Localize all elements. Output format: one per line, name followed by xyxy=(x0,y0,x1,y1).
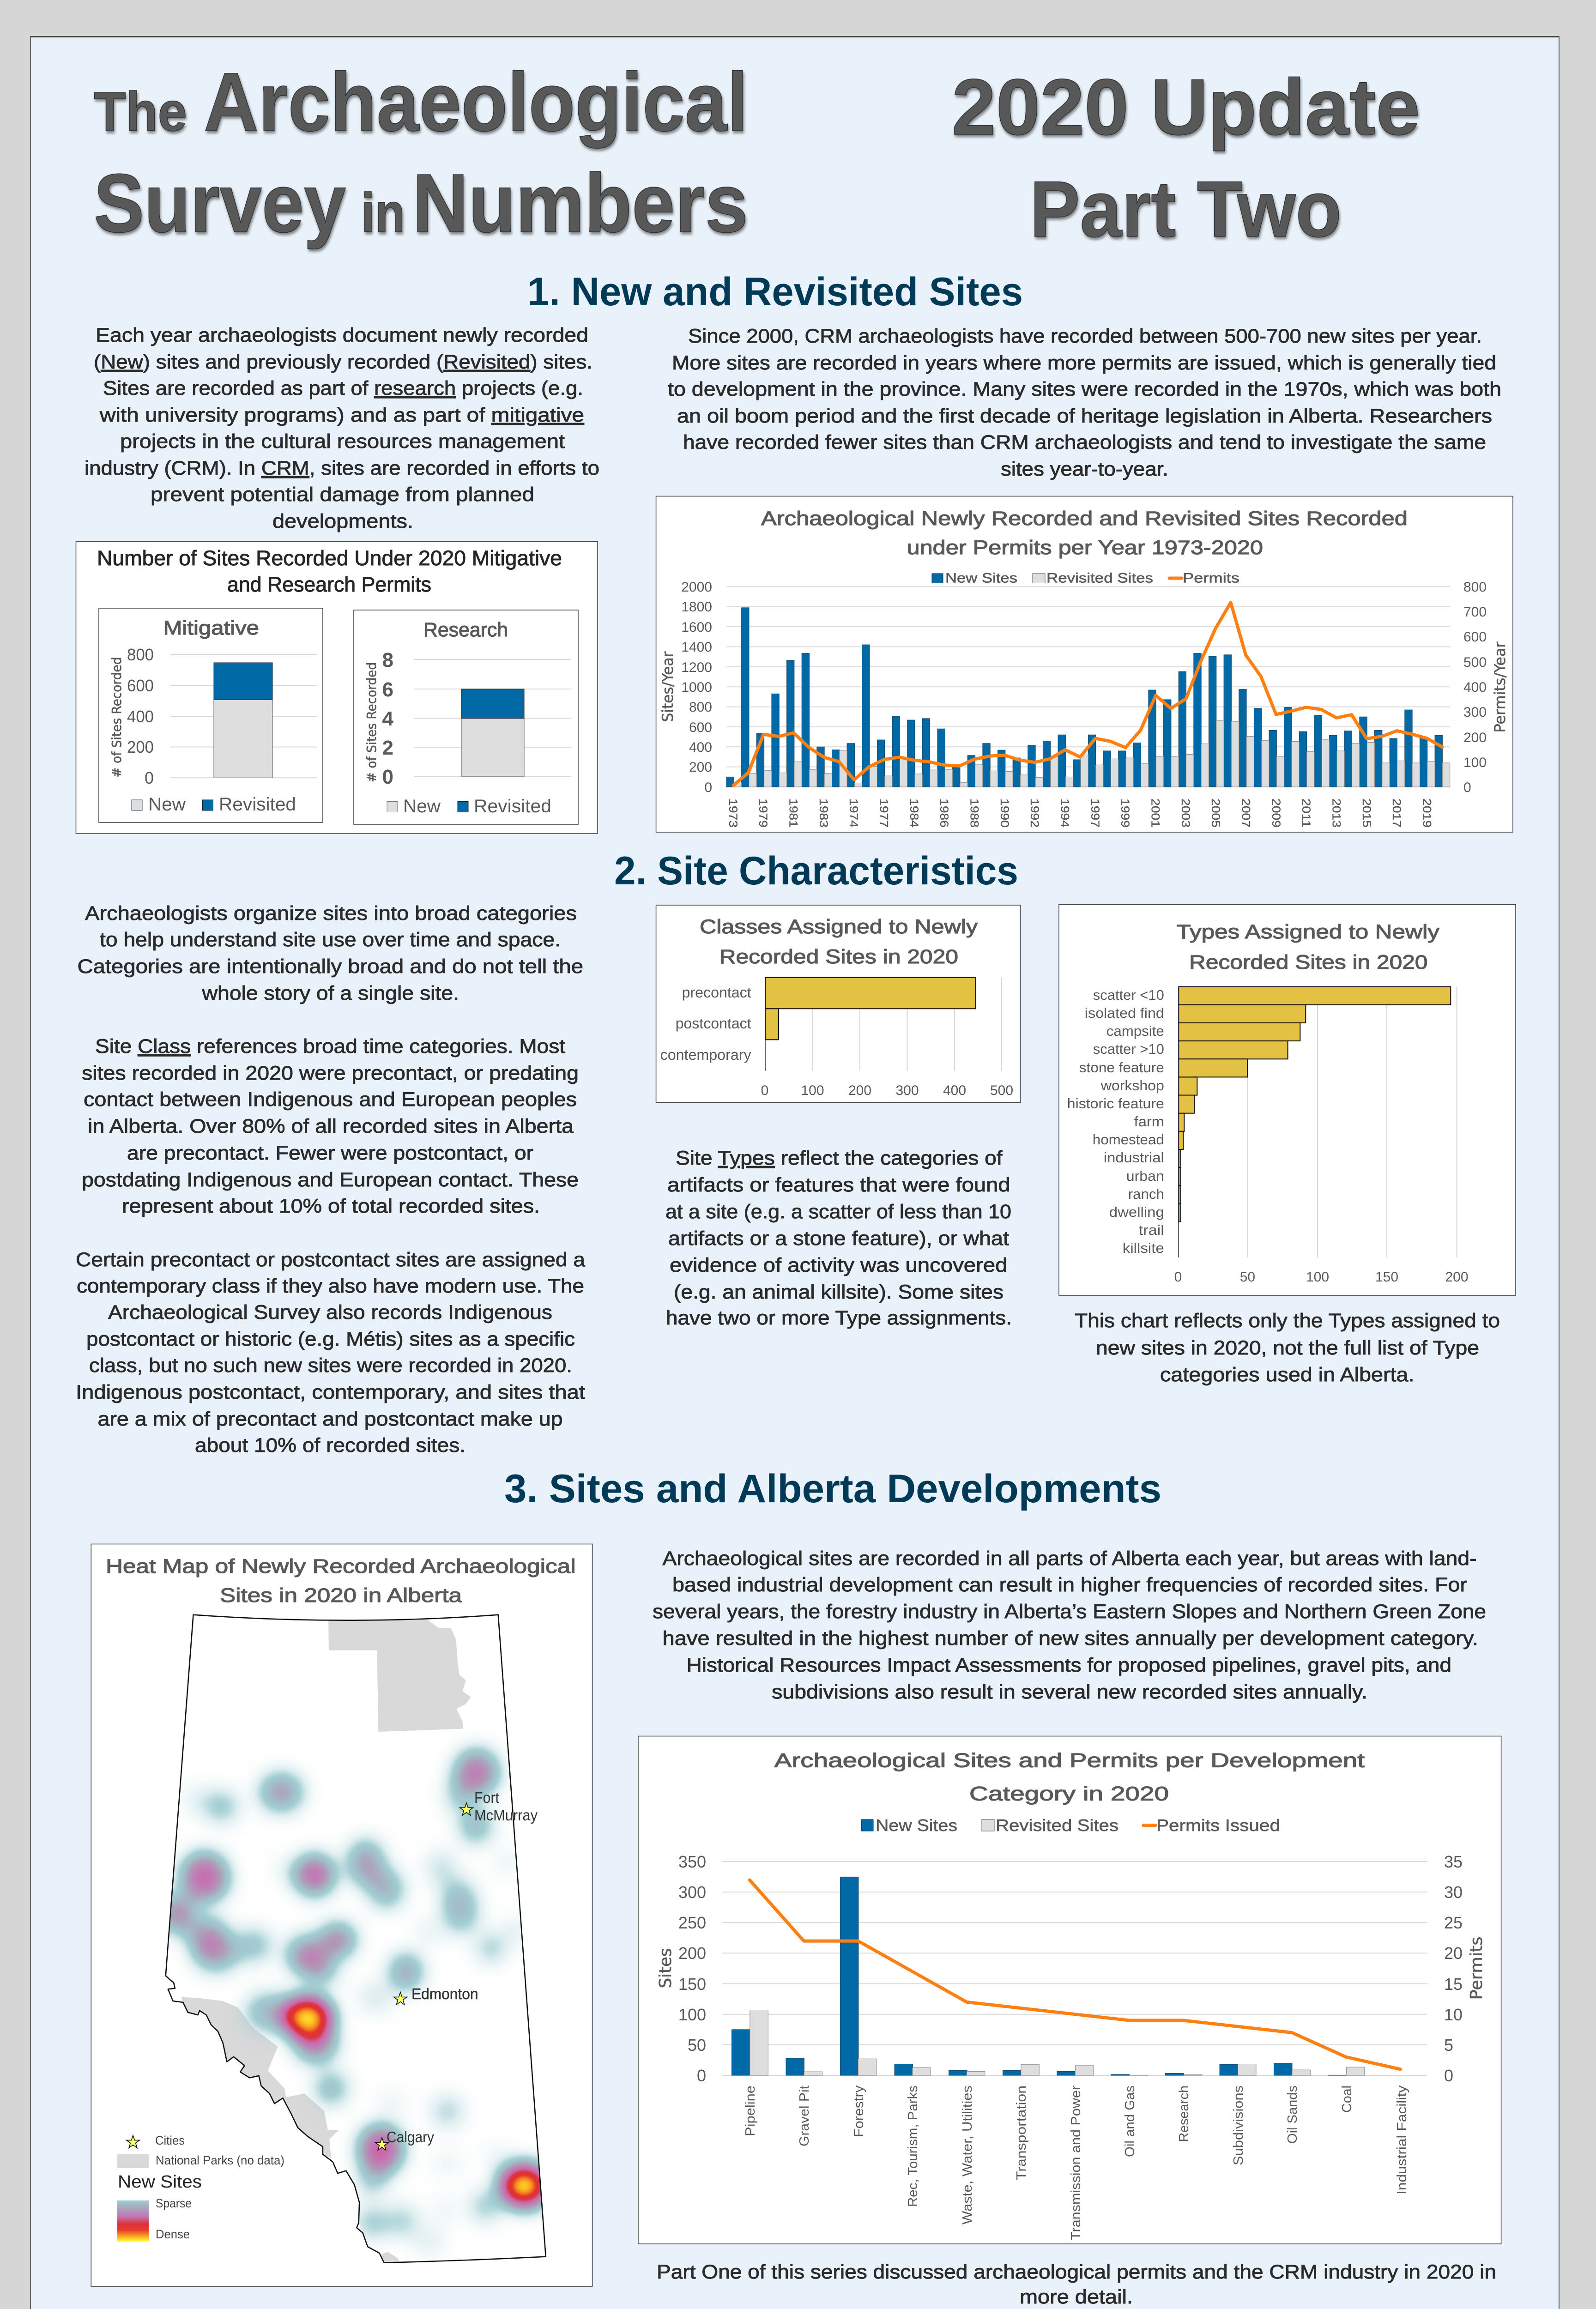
chart heading: and Research Permits xyxy=(227,573,431,596)
text block: site categories and class: Indigenous postcontact, contemporary, and sites that xyxy=(76,1381,585,1403)
left axis labels: 200 xyxy=(678,1944,706,1963)
bars xyxy=(1179,987,1451,1222)
left axis labels: 200 xyxy=(689,760,712,775)
bar: precontact xyxy=(765,978,975,1009)
chart: research: 4 xyxy=(382,707,394,730)
left axis labels: 150 xyxy=(678,1975,706,1994)
bars: new sites xyxy=(726,608,1442,787)
chart: sites and permits per development category xyxy=(638,1736,1501,2244)
category labels: Subdivisions xyxy=(1231,2085,1246,2165)
text block: section 1 intro: (New) sites and previously recorded ( Revisited ) sites. xyxy=(94,351,592,373)
bars: new sites xyxy=(732,1877,1347,2075)
bar: postcontact xyxy=(765,1009,779,1040)
text block: site types: (e.g. an animal killsite). Some sites xyxy=(674,1281,1004,1303)
parks: Rocky Mountains xyxy=(181,1997,399,2263)
category labels: Transmission and Power xyxy=(1069,2085,1083,2240)
park: Wood Buffalo xyxy=(328,1620,471,1732)
text block: site categories and class xyxy=(76,902,585,1457)
year axis labels: 1979 xyxy=(756,798,769,828)
right axis labels: 300 xyxy=(1463,705,1487,720)
left axis labels: 100 xyxy=(678,2005,706,2024)
right axis labels: 100 xyxy=(1463,755,1487,770)
year axis labels: 2007 xyxy=(1239,798,1252,828)
text block: section 3: based industrial development can result in higher frequencies of recorded sites. For xyxy=(672,1574,1467,1596)
value axis labels: 150 xyxy=(1375,1269,1398,1285)
chart: mitigative: 800 xyxy=(127,645,154,664)
title: The Archaeological Survey in Numbers: Numbers xyxy=(412,157,748,250)
city: Calgary xyxy=(375,2128,434,2150)
text block: section 1 intro: Sites are recorded as part of research projects (e.g. xyxy=(103,377,583,399)
chart: research xyxy=(354,610,578,824)
text block: site categories and class: in Alberta. Over 80% of all recorded sites in Alberta xyxy=(88,1115,574,1137)
text block: section 3: Archaeological sites are recorded in all parts of Alberta each year, but areas with land- xyxy=(662,1547,1477,1570)
right axis labels: 25 xyxy=(1444,1913,1463,1932)
map legend: Cities xyxy=(155,2134,185,2147)
chart: mitigative: New xyxy=(148,794,186,815)
text block: site categories and class: class, but no such new sites were recorded in 2020. xyxy=(89,1354,572,1377)
year axis labels: 2019 xyxy=(1421,798,1433,828)
category labels: stone feature xyxy=(1079,1059,1164,1076)
line: permits xyxy=(733,603,1442,786)
text block: section 1 intro: with university programs) and as part of mitigative xyxy=(99,404,584,426)
title: The Archaeological Survey in Numbers: Survey xyxy=(94,157,346,250)
category labels: Industrial Facility xyxy=(1395,2085,1409,2194)
text block: section 1 right: an oil boom period and the first decade of heritage legislation in Alberta. Researchers xyxy=(677,405,1492,427)
value axis labels: 200 xyxy=(1445,1269,1469,1285)
chart heading: Number of Sites Recorded Under 2020 Mitigative xyxy=(97,546,562,570)
category labels: trail xyxy=(1139,1222,1164,1238)
text block: section 3: several years, the forestry industry in Alberta’s Eastern Slopes and Northern Green Zone xyxy=(653,1601,1486,1623)
text block: section 3: Historical Resources Impact Assessments for proposed pipelines, gravel pits, and xyxy=(687,1654,1451,1676)
chart: mitigative: Revisited xyxy=(219,794,296,815)
category labels xyxy=(1067,987,1164,1256)
year axis labels: 1974 xyxy=(847,798,860,828)
category labels xyxy=(660,984,751,1063)
chart: mitigative: 400 xyxy=(127,707,154,726)
category labels: contemporary xyxy=(660,1046,751,1063)
right axis labels: 20 xyxy=(1444,1944,1463,1963)
text block: site types: have two or more Type assignments. xyxy=(666,1307,1012,1329)
left axis labels xyxy=(681,580,712,795)
left axis labels: 1200 xyxy=(681,660,712,675)
chart: mitigative xyxy=(99,608,323,822)
category labels: precontact xyxy=(682,984,751,1001)
axis title: sites: Sites xyxy=(656,1948,675,1989)
text block: site types: artifacts or features that were found xyxy=(667,1174,1010,1196)
year axis labels: 2001 xyxy=(1149,798,1162,828)
text block: section 1 right xyxy=(668,325,1501,480)
chart: research: New xyxy=(403,796,441,816)
left axis labels: 350 xyxy=(678,1852,706,1871)
city: Edmonton xyxy=(394,1985,478,2005)
text block: types chart note: new sites in 2020, not the full list of Type xyxy=(1096,1337,1479,1359)
text block: site categories and class: to help understand site use over time and space. xyxy=(100,929,561,951)
category labels: dwelling xyxy=(1109,1204,1164,1220)
value axis labels: 200 xyxy=(848,1083,871,1098)
value axis labels xyxy=(1174,1269,1469,1285)
map legend: New Sites xyxy=(118,2172,202,2192)
text block: site categories and class: represent about 10% of total recorded sites. xyxy=(122,1195,540,1217)
text block: site categories and class: Archaeologists organize sites into broad categories xyxy=(85,902,577,925)
chart: research: Revisited xyxy=(474,796,551,816)
text block: site categories and class: sites recorded in 2020 were precontact, or predating xyxy=(82,1062,579,1084)
category labels: workshop xyxy=(1100,1077,1164,1094)
value axis labels: 100 xyxy=(801,1083,824,1098)
right axis labels: 35 xyxy=(1444,1852,1463,1871)
text block: section 3 xyxy=(653,1547,1486,1703)
category labels: urban xyxy=(1126,1168,1164,1184)
chart heading: Recorded Sites in 2020 xyxy=(719,946,958,968)
left axis labels: 0 xyxy=(697,2066,706,2085)
text block: section 1 right: More sites are recorded in years where more permits are issued, which is generally tied xyxy=(672,352,1496,374)
category labels: postcontact xyxy=(676,1015,751,1032)
category labels: homestead xyxy=(1093,1131,1164,1148)
category labels: scatter >10 xyxy=(1093,1041,1164,1057)
right axis labels: 0 xyxy=(1444,2066,1453,2085)
title: The Archaeological Survey in Numbers: in xyxy=(361,182,405,244)
left axis labels: 2000 xyxy=(681,580,712,595)
chart heading xyxy=(97,546,562,596)
axis title: sites per year: Sites/Year xyxy=(659,651,677,722)
text block: site categories and class: postdating Indigenous and European contact. These xyxy=(82,1169,579,1191)
right axis labels: 500 xyxy=(1463,655,1487,670)
text block: part one note: more detail. xyxy=(1020,2286,1133,2308)
value axis labels: 0 xyxy=(1174,1269,1182,1285)
right axis labels: 200 xyxy=(1463,730,1487,745)
chart heading: Types Assigned to Newly xyxy=(1177,921,1440,943)
category labels: ranch xyxy=(1128,1186,1164,1202)
category labels: Oil Sands xyxy=(1285,2085,1300,2144)
heat map density xyxy=(159,1750,548,2254)
Alberta outline xyxy=(166,1615,546,2263)
chart: classes assigned xyxy=(656,905,1020,1103)
year axis labels: 1997 xyxy=(1088,798,1101,828)
bars: revisited sites xyxy=(750,2010,1365,2075)
chart: types assigned xyxy=(1059,905,1516,1295)
chart: newly recorded and revisited sites per year xyxy=(656,496,1513,832)
legend: Permits Issued xyxy=(1156,1816,1280,1835)
value axis labels: 50 xyxy=(1240,1269,1255,1285)
chart heading: Recorded Sites in 2020 xyxy=(1189,951,1428,973)
year axis labels: 2003 xyxy=(1179,798,1192,828)
text block: site categories and class: contemporary class if they also have modern use. The xyxy=(77,1275,584,1297)
text block: site types: artifacts or a stone feature), or what xyxy=(668,1227,1009,1250)
text block: site categories and class: postcontact or historic (e.g. Métis) sites as a specific xyxy=(86,1328,575,1350)
right axis labels: 30 xyxy=(1444,1883,1463,1902)
text block: types chart note: This chart reflects only the Types assigned to xyxy=(1075,1310,1500,1332)
left axis labels: 250 xyxy=(678,1913,706,1932)
legend: Permits xyxy=(1183,571,1239,586)
map legend: Sparse xyxy=(156,2196,192,2210)
text block: site categories and class: Categories are intentionally broad and do not tell the xyxy=(78,955,583,978)
category labels: Gravel Pit xyxy=(797,2085,812,2146)
legend: Revisited Sites xyxy=(996,1816,1118,1835)
year axis labels: 2015 xyxy=(1360,798,1373,828)
year axis labels: 2013 xyxy=(1330,798,1343,828)
text block: section 1 intro: developments. xyxy=(272,510,413,532)
chart heading xyxy=(1177,921,1440,973)
text block: section 1 right: Since 2000, CRM archaeologists have recorded between 500-700 new sites per year. xyxy=(688,325,1482,347)
text block: part one note: Part One of this series discussed archaeological permits and the CRM industry in 2020 in xyxy=(657,2261,1496,2283)
text block: part one note xyxy=(657,2261,1496,2308)
year axis labels: 1981 xyxy=(787,798,800,828)
year axis labels: 1992 xyxy=(1028,798,1041,828)
chart heading: Archaeological Sites and Permits per Development xyxy=(774,1749,1365,1771)
right axis labels: 800 xyxy=(1463,580,1487,595)
value axis labels: 100 xyxy=(1306,1269,1329,1285)
text block: section 3: have resulted in the highest number of new sites annually per development category. xyxy=(662,1627,1478,1650)
chart: research: 0 xyxy=(382,766,393,788)
chart: mitigative: 200 xyxy=(127,737,154,756)
text block: types chart note: categories used in Alberta. xyxy=(1160,1364,1414,1386)
category labels: Pipeline xyxy=(743,2085,758,2136)
title: 2020 Update Part Two: Part Two xyxy=(1030,165,1342,254)
map heading: Sites in 2020 in Alberta xyxy=(220,1584,462,1607)
map heading: Heat Map of Newly Recorded Archaeological xyxy=(106,1555,576,1578)
chart heading xyxy=(761,508,1408,559)
category labels: Waste, Water, Utilities xyxy=(960,2085,975,2224)
chart: mitigative: 0 xyxy=(145,768,154,787)
category labels: farm xyxy=(1134,1113,1164,1130)
text block: section 1 intro: Each year archaeologists document newly recorded xyxy=(96,324,588,346)
legend xyxy=(932,571,1239,586)
year axis labels: 2009 xyxy=(1270,798,1282,828)
text block: site categories and class: about 10% of recorded sites. xyxy=(195,1434,466,1457)
left axis labels: 1400 xyxy=(681,640,712,655)
legend xyxy=(862,1816,1280,1835)
panel: mitigative and research charts xyxy=(76,541,598,834)
category labels: Transportation xyxy=(1014,2085,1029,2180)
left axis labels: 1800 xyxy=(681,599,712,615)
text block: section 3: subdivisions also result in several new recorded sites annually. xyxy=(772,1681,1367,1703)
line: permits issued xyxy=(750,1880,1400,2069)
text block: section 1 right: have recorded fewer sites than CRM archaeologists and tend to investigate the same xyxy=(683,431,1486,453)
chart: research: 8 xyxy=(382,649,393,671)
year axis labels: 1983 xyxy=(817,798,830,828)
text block: site types: evidence of activity was uncovered xyxy=(670,1254,1008,1276)
text block: section 1 intro: projects in the cultural resources management xyxy=(120,430,565,453)
left axis labels: 300 xyxy=(678,1883,706,1902)
chart heading: Classes Assigned to Newly xyxy=(700,916,978,938)
bars: revisited sites xyxy=(734,720,1450,787)
text block: site categories and class: are a mix of precontact and postcontact make up xyxy=(98,1408,562,1430)
chart heading: Category in 2020 xyxy=(969,1783,1169,1805)
category labels: campsite xyxy=(1106,1023,1164,1039)
title: The Archaeological Survey in Numbers: Archaeological xyxy=(204,56,748,149)
left axis labels: 50 xyxy=(688,2036,706,2055)
value axis labels: 400 xyxy=(943,1083,966,1098)
chart heading xyxy=(774,1749,1365,1805)
right axis labels: 10 xyxy=(1444,2005,1463,2024)
chart heading xyxy=(700,916,978,968)
axis title: permits per year: Permits/Year xyxy=(1491,641,1509,732)
text block: section 1 right: sites year-to-year. xyxy=(1001,458,1168,480)
left axis labels: 400 xyxy=(689,740,712,755)
right axis labels xyxy=(1444,1852,1463,2085)
right axis labels: 700 xyxy=(1463,604,1487,620)
left axis labels xyxy=(678,1852,706,2085)
right axis labels: 15 xyxy=(1444,1975,1463,1994)
text block: site categories and class: contact between Indigenous and European peoples xyxy=(84,1088,577,1111)
chart: research: 2 xyxy=(382,737,393,759)
text block: site types xyxy=(665,1147,1012,1329)
category labels xyxy=(743,2085,1409,2240)
map heading xyxy=(106,1555,576,1607)
year axis labels: 1990 xyxy=(998,798,1011,828)
title: The Archaeological Survey in Numbers xyxy=(94,56,748,250)
text block: section 1 intro: prevent potential damage from planned xyxy=(151,484,534,506)
heading: section 3: 3. Sites and Alberta Developments xyxy=(504,1467,1161,1511)
chart: research: # of Sites Recorded xyxy=(364,662,379,782)
chart heading: under Permits per Year 1973-2020 xyxy=(907,537,1263,559)
text block: site categories and class: Archaeological Survey also records Indigenous xyxy=(108,1301,552,1324)
category labels: industrial xyxy=(1104,1149,1164,1166)
right axis labels: 0 xyxy=(1463,780,1471,795)
category labels: Forestry xyxy=(852,2085,866,2137)
city: Fort McMurray: Fort xyxy=(474,1789,499,1806)
text block: section 1 right: to development in the province. Many sites were recorded in the 1970s, which was both xyxy=(668,378,1501,400)
category labels: killsite xyxy=(1123,1240,1164,1256)
year axis labels: 1986 xyxy=(937,798,950,828)
value axis labels: 0 xyxy=(761,1083,768,1098)
year axis labels: 2005 xyxy=(1209,798,1222,828)
city: Edmonton: Edmonton xyxy=(411,1985,478,2002)
title: 2020 Update Part Two: 2020 Update xyxy=(952,63,1420,151)
panel: heat map xyxy=(91,1544,592,2286)
year axis labels: 1977 xyxy=(877,798,890,828)
year axis labels: 1984 xyxy=(907,798,920,828)
right axis labels xyxy=(1463,580,1487,795)
axis title: permits: Permits xyxy=(1467,1937,1486,2000)
category labels: Rec, Tourism, Parks xyxy=(906,2085,920,2207)
text block: site categories and class: Certain precontact or postcontact sites are assigned a xyxy=(76,1249,585,1271)
year axis labels xyxy=(726,798,1433,828)
map legend xyxy=(117,2134,284,2242)
right axis labels: 5 xyxy=(1444,2036,1453,2055)
legend: New Sites xyxy=(876,1816,957,1835)
text block: section 1 intro: industry (CRM). In CRM, sites are recorded in efforts to xyxy=(85,457,599,479)
chart heading: Archaeological Newly Recorded and Revisited Sites Recorded xyxy=(761,508,1408,530)
text block: site categories and class: Site Class references broad time categories. Most xyxy=(95,1035,565,1058)
chart: research: 6 xyxy=(382,678,393,701)
title: 2020 Update Part Two xyxy=(952,63,1420,254)
category labels: scatter <10 xyxy=(1093,987,1164,1003)
value axis labels: 300 xyxy=(895,1083,919,1098)
left axis labels: 1000 xyxy=(681,680,712,695)
city: Calgary: Calgary xyxy=(387,2128,434,2146)
category labels: Coal xyxy=(1340,2085,1354,2113)
chart: mitigative: 600 xyxy=(127,676,154,695)
heading: section 2: 2. Site Characteristics xyxy=(614,849,1018,893)
left axis labels: 1600 xyxy=(681,620,712,635)
heading: section 1: 1. New and Revisited Sites xyxy=(527,270,1023,314)
text block: types chart note xyxy=(1075,1310,1500,1386)
left axis labels: 800 xyxy=(689,700,712,715)
year axis labels: 2017 xyxy=(1390,798,1403,828)
year axis labels: 1999 xyxy=(1118,798,1131,828)
category labels: Oil and Gas xyxy=(1123,2085,1137,2157)
year axis labels: 1994 xyxy=(1058,798,1071,828)
text block: site categories and class: whole story of a single site. xyxy=(202,982,459,1004)
left axis labels: 600 xyxy=(689,720,712,735)
category labels: Research xyxy=(1177,2085,1191,2142)
map legend: Dense xyxy=(156,2227,190,2241)
category labels: historic feature xyxy=(1067,1095,1164,1112)
city: Fort McMurray: McMurray xyxy=(474,1807,538,1824)
year axis labels: 1973 xyxy=(726,798,739,828)
text block: site types: at a site (e.g. a scatter of less than 10 xyxy=(665,1201,1011,1223)
left axis labels: 0 xyxy=(704,780,712,795)
year axis labels: 2011 xyxy=(1300,798,1312,828)
map legend: National Parks (no data) xyxy=(156,2153,284,2167)
chart: research: Research xyxy=(423,619,508,641)
title: The Archaeological Survey in Numbers: The xyxy=(94,81,187,143)
city: Fort McMurray xyxy=(460,1789,538,1824)
text block: site categories and class: are precontact. Fewer were postcontact, or xyxy=(127,1142,533,1164)
text block: section 1 intro xyxy=(85,324,599,532)
right axis labels: 600 xyxy=(1463,629,1487,645)
category labels: isolated find xyxy=(1085,1005,1164,1021)
value axis labels xyxy=(761,1083,1013,1098)
legend: Revisited Sites xyxy=(1046,571,1153,586)
text block: site types: Site Types reflect the categories of xyxy=(676,1147,1003,1169)
chart: mitigative: # of Sites Recorded xyxy=(109,657,124,778)
year axis labels: 1988 xyxy=(968,798,981,828)
legend: New Sites xyxy=(945,571,1017,586)
chart: mitigative: Mitigative xyxy=(163,617,259,639)
right axis labels: 400 xyxy=(1463,680,1487,695)
value axis labels: 500 xyxy=(990,1083,1013,1098)
